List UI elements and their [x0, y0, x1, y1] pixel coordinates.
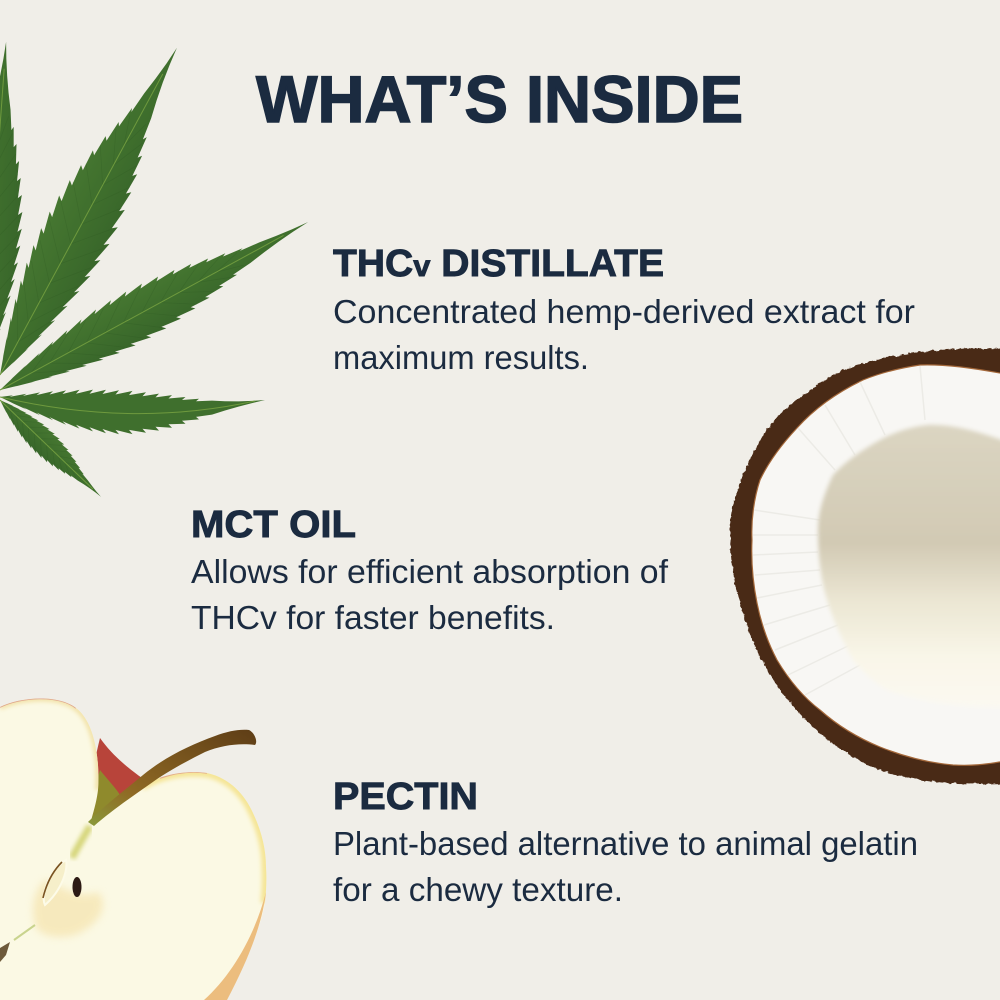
text: THCv Distillate description	[333, 293, 915, 376]
icon: apple	[0, 690, 270, 1000]
text: MCT Oil description: THCv for faster benefits.	[191, 599, 555, 636]
apple core	[33, 880, 103, 937]
apple red skin	[90, 738, 142, 822]
text: THCv Distillate description: Concentrated hemp-derived extract for	[333, 293, 915, 330]
coconut shell	[730, 349, 1000, 784]
apple skin edge	[204, 892, 266, 1000]
text: Pectin description	[333, 825, 918, 908]
title: WHAT’S INSIDE	[256, 62, 743, 136]
heading: Pectin: PECTIN	[333, 776, 478, 818]
icon: hemp leaf	[0, 32, 321, 507]
apple right flesh	[0, 760, 270, 1000]
apple left flesh	[0, 698, 98, 944]
apple stem	[88, 730, 256, 826]
text: Pectin description: Plant-based alternative to animal gelatin	[333, 825, 918, 862]
text: MCT Oil description: Allows for efficient absorption of	[191, 553, 669, 590]
text: Pectin description: for a chewy texture.	[333, 871, 623, 908]
coconut cavity	[818, 425, 1000, 707]
coconut flesh ribs	[753, 366, 925, 695]
apple seed	[72, 877, 82, 897]
heading: MCT Oil: MCT OIL	[191, 504, 356, 546]
coconut white flesh	[752, 365, 1000, 765]
icon: coconut	[730, 349, 1000, 784]
text: MCT Oil description	[191, 553, 669, 636]
heading: THCv Distillate: THCv DISTILLATE	[333, 243, 664, 285]
text: THCv Distillate description: maximum results.	[333, 339, 589, 376]
